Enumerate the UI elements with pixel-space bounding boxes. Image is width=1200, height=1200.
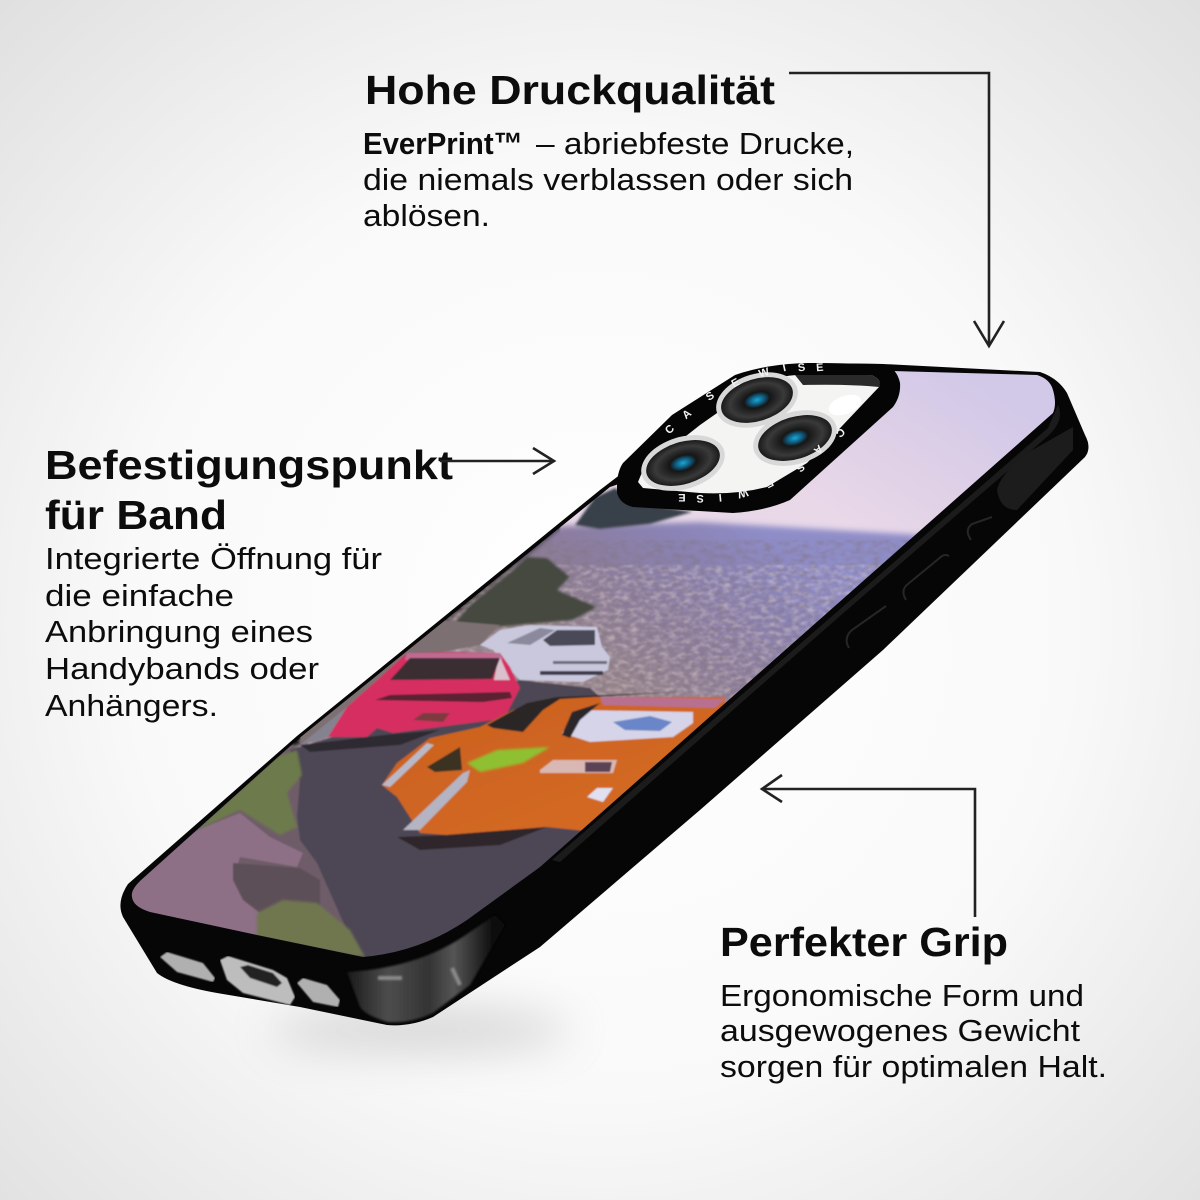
camera ring brand text: E (816, 362, 824, 374)
body text: Handybands oder (45, 651, 319, 686)
camera ring brand text: W (757, 366, 771, 380)
heading: Perfekter Grip (720, 919, 1008, 965)
car underside (397, 827, 547, 850)
city texture dark (292, 540, 908, 748)
tree top (575, 488, 692, 529)
pink ground (120, 813, 303, 940)
body text: Ergonomische Form und (720, 978, 1084, 1013)
body text: die niemals verblassen oder sich (363, 162, 853, 197)
side buttons (847, 517, 992, 648)
lens right (746, 401, 844, 475)
white car (480, 625, 610, 682)
callout: Befestigungspunkt (45, 442, 453, 723)
body text: ausgewogenes Gewicht (720, 1013, 1080, 1048)
body text: Anhängers. (45, 688, 218, 723)
heading (45, 442, 453, 538)
camera ring brand text: E (763, 476, 775, 490)
camera window (638, 375, 880, 493)
heading: für Band (45, 492, 227, 538)
plate (587, 788, 613, 802)
phone photo (110, 360, 1080, 965)
camera ring brand text: S (704, 390, 717, 404)
charging port (220, 956, 295, 1005)
body text: sorgen für optimalen Halt. (720, 1049, 1107, 1084)
phone case (110, 360, 1088, 1025)
green graphic (467, 747, 550, 772)
camera ring brand text: C (663, 423, 677, 437)
camera ring brand text: A (811, 442, 825, 456)
city landscape (292, 518, 919, 748)
tail light (540, 760, 617, 773)
corner highlight (378, 968, 460, 985)
camera ring brand text: E (678, 491, 686, 503)
arrow: strap attachment (440, 448, 554, 474)
city texture light (291, 564, 881, 748)
orange car (382, 692, 725, 850)
body text (720, 978, 1107, 1084)
camera ring brand text: I (718, 491, 722, 503)
camera ring brand text: S (696, 492, 704, 504)
speaker left (160, 952, 215, 982)
body text: ablösen. (363, 198, 490, 233)
camera ring brand text: I (782, 362, 787, 374)
heading: Befestigungspunkt (45, 442, 453, 488)
bottom corner glossy (347, 915, 505, 1022)
lens top (709, 363, 805, 437)
tree left (455, 556, 598, 628)
side strap slot (997, 427, 1073, 510)
camera ring brand text: E (730, 376, 742, 390)
hillside (300, 620, 500, 745)
case body (120, 363, 1089, 1025)
callout: Perfekter Grip (720, 919, 1107, 1084)
body text (363, 126, 854, 233)
window inner shade (795, 375, 880, 387)
camera ring brand text: W (736, 486, 749, 500)
lens left (634, 426, 732, 500)
brown patch (233, 863, 320, 913)
arrow: grip (762, 775, 975, 917)
camera bump (617, 362, 900, 513)
camera ring brand text: C (833, 425, 847, 439)
camera ring brand text: S (797, 362, 806, 374)
body text: EverPrint™ (363, 126, 523, 161)
grass upper (197, 750, 302, 835)
heading: Hohe Druckqualität (365, 67, 775, 113)
pink car (300, 652, 520, 745)
camera ring brand text (663, 362, 847, 504)
sky (559, 371, 1055, 540)
wheel rear (382, 743, 434, 787)
body text: die einfache (45, 578, 234, 613)
camera ring brand text: S (793, 460, 807, 474)
callout: Hohe Druckqualität (363, 67, 854, 233)
body text (45, 541, 382, 723)
body text: Anbringung eines (45, 614, 313, 649)
body text: Integrierte Öffnung für (45, 541, 382, 576)
road (290, 680, 599, 957)
speaker right (297, 978, 340, 1007)
pink car shadow (300, 730, 440, 752)
arrow: print quality (789, 73, 1004, 346)
flash (826, 391, 864, 419)
body text: – abriebfeste Drucke, (536, 126, 854, 161)
dark decal (427, 747, 462, 772)
lower ground base (189, 745, 359, 956)
phone shadow (270, 1008, 570, 1052)
wheel front (403, 770, 470, 830)
camera ring brand text: A (680, 408, 694, 422)
grass lower (257, 900, 365, 957)
side rail highlight (552, 405, 1060, 862)
